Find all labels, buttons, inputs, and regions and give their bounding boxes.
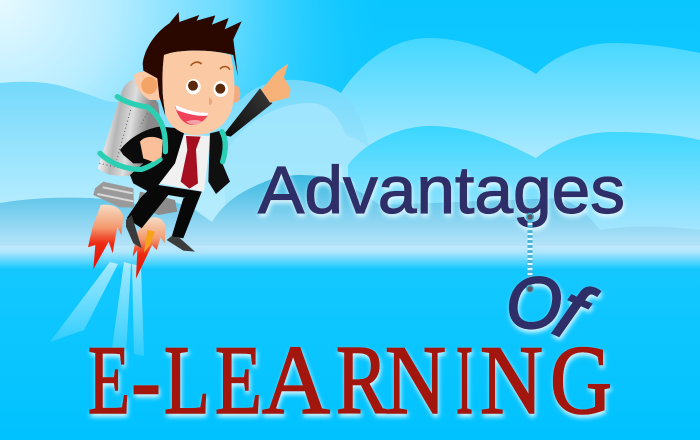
heading: Of: f [543,266,607,360]
cloud: back left [0,80,370,250]
face [162,51,234,135]
trousers and shoes [126,185,202,252]
heading: Of: O [506,264,562,344]
heading: E-LEARNING: N [480,326,543,435]
hair [143,12,242,116]
heading: E-LEARNING: G [550,326,612,435]
icon: arm and hand pointing [223,63,291,137]
rope end eyelet [526,286,534,292]
cloud: middle left [225,103,380,250]
eyebrows [191,62,230,70]
right ear [231,85,240,103]
cloud: front [0,175,700,250]
left ear [134,71,163,100]
exhaust trails [50,262,144,356]
nose [209,97,212,105]
heading: Advantages: Advantages [258,153,625,228]
mouth [175,105,209,125]
heading: E-LEARNING: E [215,326,262,435]
heading: E-LEARNING: I [456,326,473,435]
suit and shirt [120,127,230,194]
water band [0,246,700,440]
character: jetpack man [88,12,291,279]
cloud: middle right [348,126,700,250]
icon: jetpack [93,78,177,215]
eyes [186,79,228,97]
heading: E-LEARNING: E [88,326,130,435]
heading: E-LEARNING: R [336,326,388,435]
head [134,12,242,135]
heading: E-LEARNING: A [262,326,330,435]
heading: E-LEARNING: - [131,326,161,435]
icon: flames [88,205,166,279]
clouds [0,38,700,250]
rope linking heading to Of [526,214,534,289]
fist [140,137,163,162]
cloud: back right [341,38,700,250]
heading: E-LEARNING: N [385,326,446,435]
jetpack straps [100,97,225,169]
heading: Of [506,264,607,360]
heading: E-LEARNING: L [164,326,210,435]
